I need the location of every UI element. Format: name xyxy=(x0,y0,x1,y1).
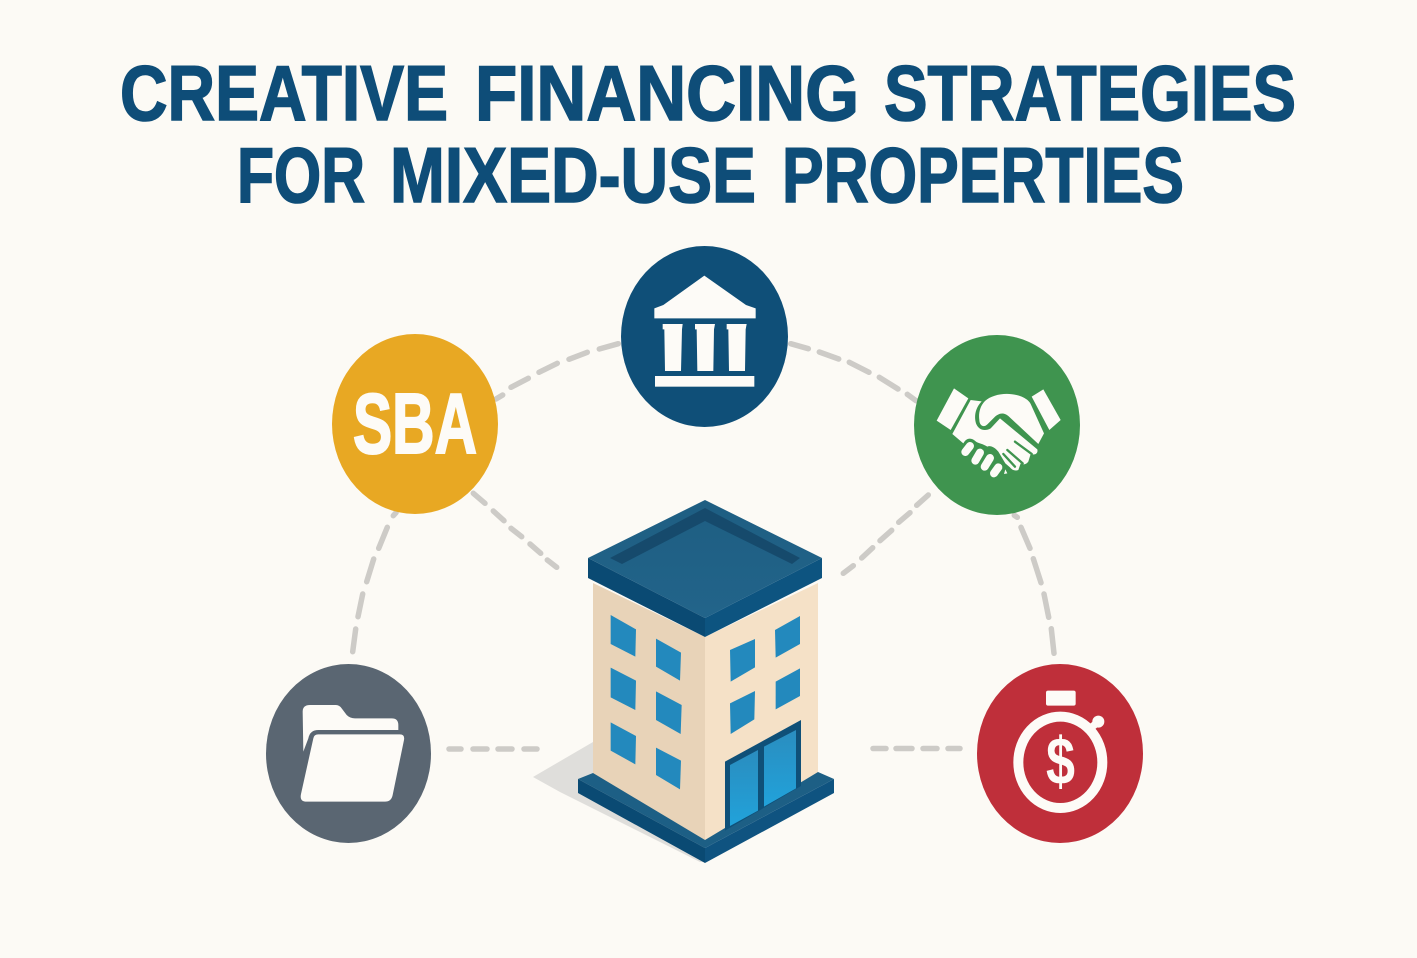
icon: handshake circle xyxy=(914,335,1080,515)
title: FOR xyxy=(237,131,365,219)
dashed connector: bank to handshake xyxy=(791,344,916,401)
building door xyxy=(725,720,801,831)
icon: folder circle xyxy=(266,664,431,843)
icon: SBA circle: SBA xyxy=(353,377,477,472)
dashed connector: SBA to folder xyxy=(353,513,396,652)
building shadow xyxy=(533,742,705,862)
icon: stopwatch circle: $ xyxy=(1046,724,1075,799)
dashed connector: SBA to bank xyxy=(496,344,618,399)
icon: stopwatch circle xyxy=(977,664,1143,843)
dashed connector: handshake to building xyxy=(843,495,928,573)
title: PROPERTIES xyxy=(782,131,1184,219)
building walls xyxy=(593,583,818,840)
building roof xyxy=(588,500,822,637)
title: CREATIVE xyxy=(120,49,448,137)
dashed connector: SBA to building xyxy=(473,493,557,567)
building base xyxy=(578,772,834,863)
icon: bank circle xyxy=(621,246,788,427)
title xyxy=(120,49,1296,219)
title: STRATEGIES xyxy=(884,49,1296,137)
dashed connector: building to stopwatch xyxy=(873,746,960,751)
dashed connector: folder to building xyxy=(449,746,537,752)
building xyxy=(533,500,834,863)
building windows xyxy=(611,615,800,789)
title: MIXED-USE xyxy=(390,131,756,219)
icon: SBA circle xyxy=(332,334,498,514)
dashed connector: handshake to stopwatch xyxy=(1014,515,1054,653)
title: FINANCING xyxy=(475,49,859,137)
